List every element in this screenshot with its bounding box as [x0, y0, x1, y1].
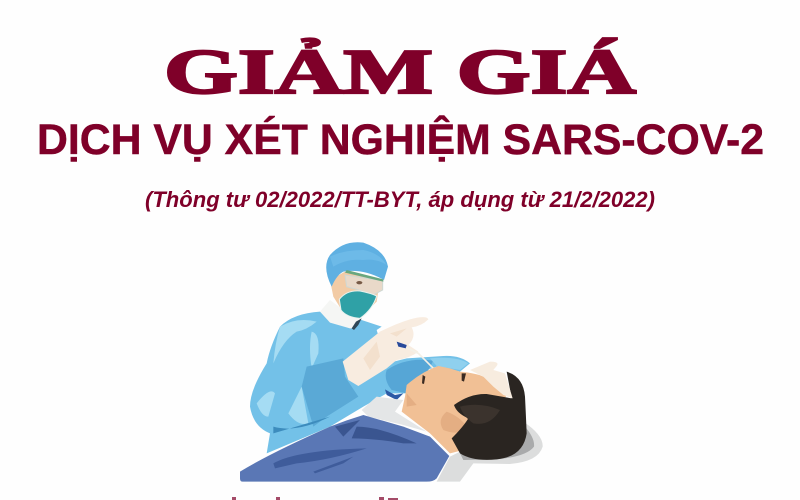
title: GIẢM GIÁ: GIẢM GIÁ — [164, 36, 636, 107]
gauze and medic hand on forehead — [470, 362, 513, 398]
gown highlights — [273, 320, 317, 363]
legal reference note: (Thông tư 02/2022/TT-BYT, áp dụng từ 21/2/2022) — [145, 187, 655, 212]
pillow — [437, 422, 543, 482]
goggles — [345, 275, 383, 295]
face mask — [339, 291, 377, 318]
gloved hand with swab — [343, 317, 437, 386]
clipped tops of next-line lettering — [232, 497, 398, 500]
illustration: medic swabbing a patient — [240, 242, 543, 482]
medic gown — [250, 312, 470, 453]
patient hair — [452, 372, 527, 460]
patient collar — [362, 397, 427, 432]
medic cap — [326, 242, 388, 287]
subtitle: service name: DỊCH VỤ XÉT NGHIỆM SARS-COV-2 — [37, 115, 764, 164]
patient body — [240, 415, 449, 482]
medic face — [330, 272, 380, 318]
patient head — [402, 366, 507, 453]
medic neck and collar — [320, 300, 362, 328]
